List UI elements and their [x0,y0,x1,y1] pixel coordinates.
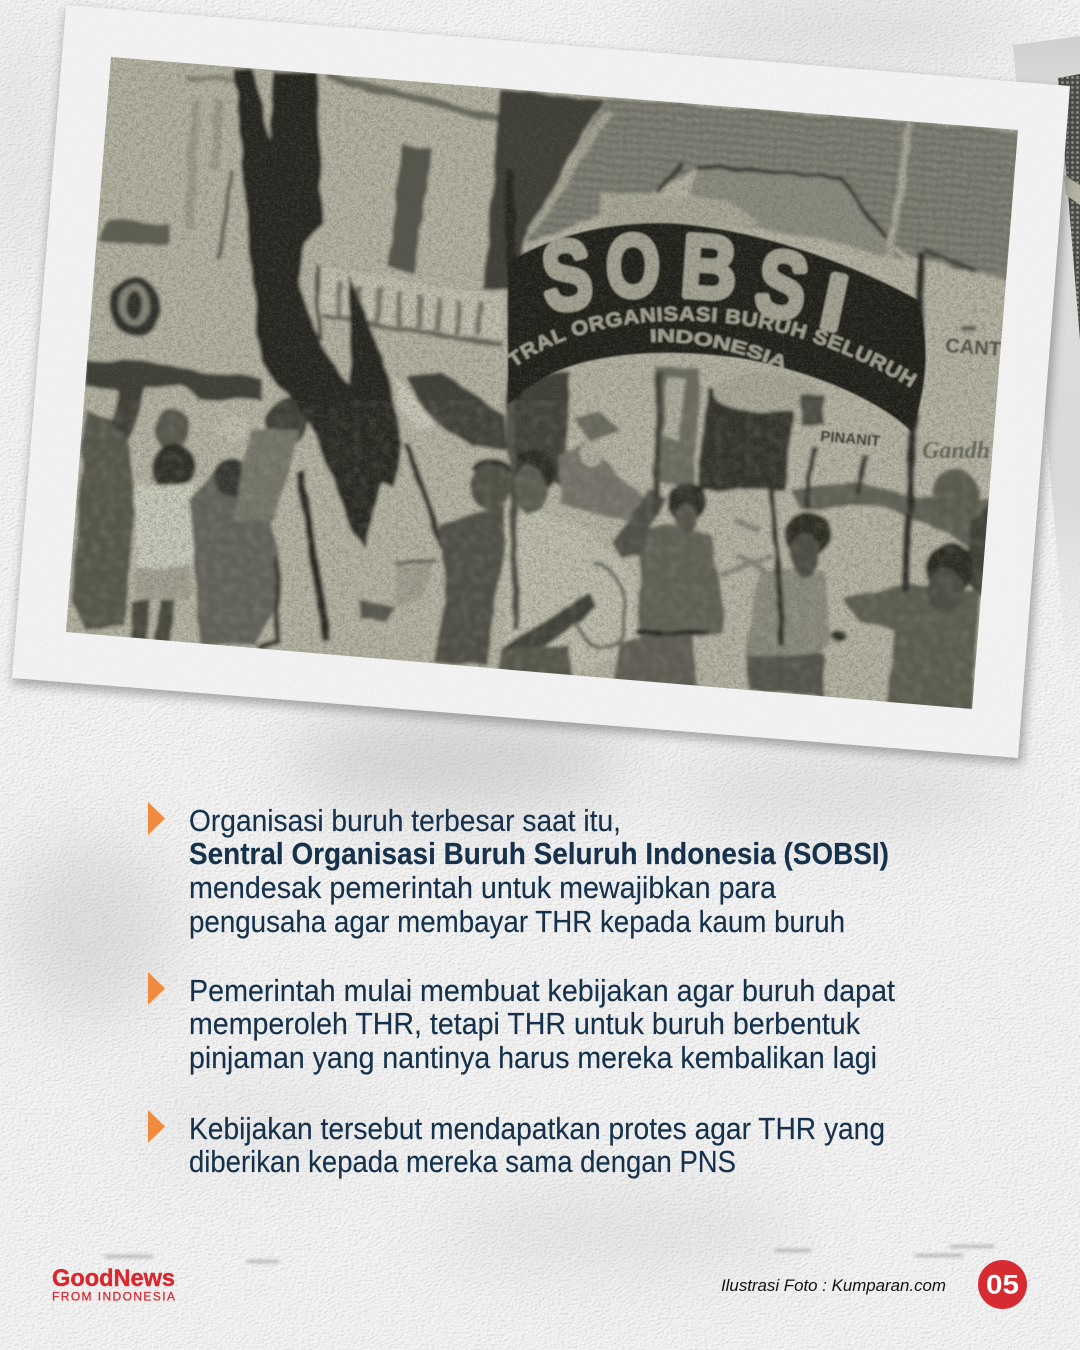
page number badge [978,1260,1027,1309]
dormer [530,110,910,262]
black flags [233,67,403,548]
white photo frame [0,0,1080,770]
right background crowd [790,448,995,600]
SOBSI banner: S [537,218,597,332]
SOBSI banner: O [606,216,660,315]
marcher in white shirt [500,449,640,680]
SOBSI banner: TRAL ORGANISASI BURUH SELURUH [507,305,918,388]
shop signs [820,335,1007,464]
GoodNews logo [52,1265,175,1304]
bullet 1 [148,802,889,939]
SOBSI banner: S [748,228,816,341]
arrow bullet 2 [148,972,165,1005]
far crowd band [85,360,508,450]
bullet 2 [148,972,895,1075]
dark jacket figure [433,461,510,665]
bullet 2 text [189,973,895,1075]
bullet 1 text: mendesak pemerintah untuk mewajibkan para [189,870,777,905]
flag poles [300,170,922,645]
tiled roof [525,98,1020,282]
marcher patterned shirt [745,512,846,697]
page number badge: 05 [986,1270,1019,1300]
background gray figure [560,442,645,525]
bullet 3 text: Kebijakan tersebut mendapatkan protes agar THR yang [189,1111,885,1146]
SOBSI banner: INDONESIA [650,328,785,368]
photo film grain [40,30,1050,740]
bullet 1 text: pengusaha agar membayar THR kepada kaum buruh [189,904,845,939]
left pennant [109,277,161,337]
bullet 1 text: Organisasi buruh terbesar saat itu, [189,803,621,838]
photo ground tone [66,57,1018,709]
bullet 2 text: Pemerintah mulai membuat kebijakan agar buruh dapat [189,973,895,1008]
bullet 3 text [189,1111,885,1179]
photo frame shadow [12,9,1074,764]
shop signs: Gandh [922,438,990,464]
shop signs: CANTI [945,335,1007,361]
shop signs: PINANIT [820,428,881,450]
bullet 3 [148,1110,885,1179]
left crowd figures [72,380,308,648]
marcher bare chest [612,483,725,700]
bullet 2 text: pinjaman yang nantinya harus mereka kembalikan lagi [189,1040,877,1075]
bullet 1 text [189,803,889,939]
photo mottling [40,30,1050,740]
bullet 1 text: Sentral Organisasi Buruh Seluruh Indonesia (SOBSI) [189,836,889,871]
GoodNews logo: GoodNews [52,1265,175,1292]
GoodNews logo: FROM INDONESIA [52,1290,175,1304]
marcher right [843,544,980,715]
SOBSI banner: B [678,216,740,320]
arrow bullet 1 [148,802,165,835]
SOBSI banner: I [813,256,855,348]
arrow bullet 3 [148,1110,165,1143]
bullet 2 text: memperoleh THR, tetapi THR untuk buruh berbentuk [189,1006,860,1041]
right wall [905,262,1015,500]
building details [100,77,503,345]
crowd light mottling [40,400,1050,730]
dark tree [483,88,605,490]
historic photo: SOBSI labour march [66,57,1018,709]
SOBSI banner [506,222,926,432]
center scribbled poster [720,520,770,575]
door and globe under banner [655,365,825,490]
bullet 3 text: diberikan kepada mereka sama dengan PNS [189,1144,736,1179]
back photo card top right [1013,36,1080,680]
photo credit: Ilustrasi Foto : Kumparan.com [721,1276,946,1295]
figure with white coat and hand [358,373,443,622]
